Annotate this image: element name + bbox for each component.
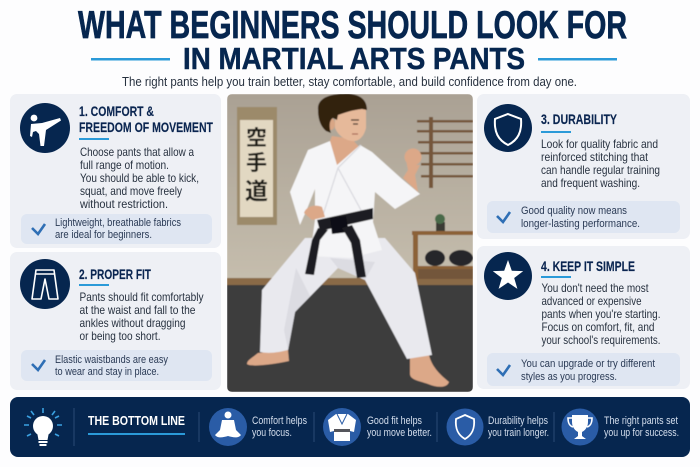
icon: shield: [484, 104, 532, 152]
hanging scroll: [237, 107, 277, 225]
callout: are ideal for beginners.: [55, 229, 152, 241]
item: success: The right pants set: [604, 415, 678, 427]
item: good fit: [323, 408, 432, 446]
body text: full range of motion.: [80, 159, 169, 172]
body text: without restriction.: [79, 198, 168, 211]
panel: keep it simple: [477, 246, 690, 389]
callout: Lightweight, breathable fabrics: [55, 217, 181, 229]
icon: pants: [20, 259, 70, 309]
callout: to wear and stay in place.: [55, 366, 159, 378]
icon: martial arts kick: [20, 103, 70, 153]
body text: [80, 291, 204, 343]
body text: or being too short.: [80, 330, 160, 343]
hanging scroll: 手: [246, 152, 267, 175]
callout: styles as you progress.: [521, 371, 617, 383]
item: durability: you train longer.: [488, 427, 549, 439]
subtitle: The right pants help you train better, stay comfortable, and build confidence from day one.: [122, 74, 577, 89]
item: good fit: Good fit helps: [367, 415, 422, 427]
callout: [21, 350, 212, 381]
callout: [487, 201, 680, 233]
body text: [79, 146, 199, 211]
body text: Look for quality fabric and: [541, 138, 658, 151]
panel: the bottom line: [10, 397, 690, 457]
icon: star: [484, 252, 532, 300]
heading: 2. PROPER FIT: [79, 266, 151, 282]
item: comfort: you focus.: [252, 427, 292, 439]
callout: [21, 214, 212, 244]
panel: durability: [477, 94, 690, 239]
body text: squat, and move freely: [80, 185, 182, 198]
body text: and frequent washing.: [541, 177, 640, 190]
hanging scroll: 道: [245, 178, 268, 204]
body text: [541, 138, 660, 190]
heading: 3. DURABILITY: [541, 111, 617, 127]
callout: [487, 353, 680, 386]
callout: Good quality now means: [521, 205, 627, 217]
item: comfort: Comfort helps: [252, 415, 307, 427]
heading: [79, 103, 213, 135]
title: [78, 4, 627, 76]
body text: reinforced stitching that: [541, 151, 649, 164]
item: durability: Durability helps: [488, 415, 548, 427]
item: good fit: you move better.: [367, 427, 432, 439]
body text: [542, 282, 660, 347]
body text: pants when you're starting.: [542, 308, 660, 321]
heading: 1. COMFORT &: [79, 103, 154, 119]
icon: light bulb: [24, 408, 62, 446]
body text: You should be able to kick,: [80, 172, 199, 185]
heading: 4. KEEP IT SIMPLE: [541, 258, 635, 274]
body text: Pants should fit comfortably: [80, 291, 204, 304]
photo: boy in white gi and black belt in a dojo: [227, 94, 473, 392]
body text: your school's requirements.: [542, 334, 660, 347]
item: success: [562, 408, 679, 446]
body text: at the waist and fall to the: [80, 304, 196, 317]
panel: comfort and freedom of movement: [10, 94, 221, 248]
item: durability: [446, 408, 549, 446]
plant and shelf: [412, 214, 473, 281]
boy: [247, 94, 449, 387]
callout: longer-lasting performance.: [521, 218, 640, 230]
body text: Focus on comfort, fit, and: [542, 321, 654, 334]
heading: THE BOTTOM LINE: [88, 414, 185, 428]
heading: FREEDOM OF MOVEMENT: [79, 119, 213, 135]
item: comfort: [209, 408, 307, 446]
panel: proper fit: [10, 252, 221, 390]
body text: advanced or expensive: [542, 295, 642, 308]
body text: ankles without dragging: [80, 317, 186, 330]
hanging scroll: 空: [246, 127, 267, 150]
callout: You can upgrade or try different: [521, 358, 655, 370]
title: IN MARTIAL ARTS PANTS: [183, 41, 525, 76]
item: success: you up for success.: [604, 427, 679, 439]
callout: Elastic waistbands are easy: [55, 354, 169, 366]
weapon rack: [417, 117, 473, 188]
body text: Choose pants that allow a: [80, 146, 194, 159]
body text: You don't need the most: [542, 282, 649, 295]
body text: can handle regular training: [541, 164, 660, 177]
